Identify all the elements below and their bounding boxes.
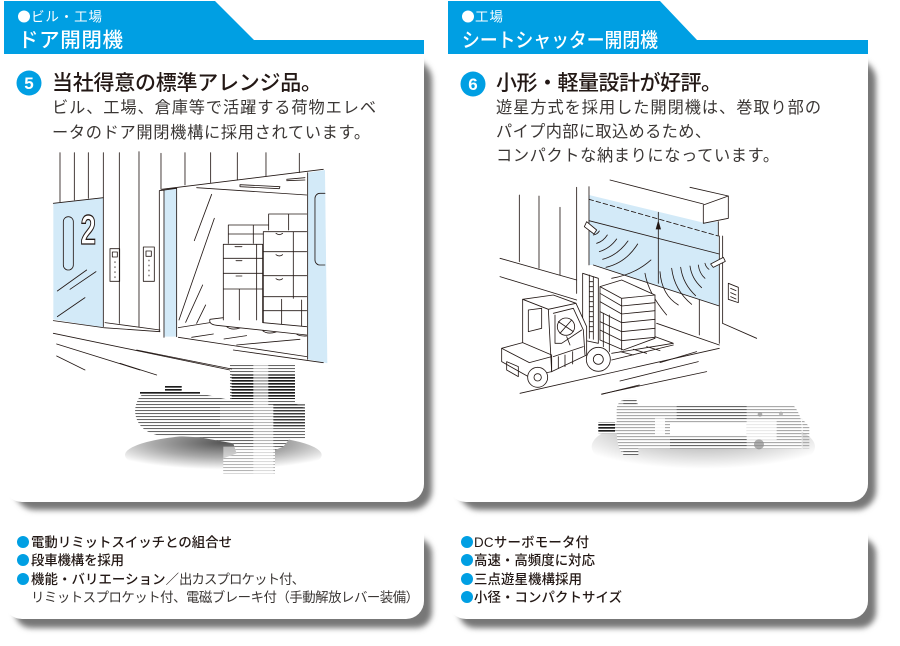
left feature list: リミットスプロケット付、電磁ブレーキ付（手動解放レバー装備）	[31, 589, 419, 605]
left feature list panel	[4, 528, 432, 628]
right body text: コンパクトな納まりになっています。	[496, 147, 779, 165]
right feature list: 三点遊星機構採用	[474, 572, 582, 587]
right header tab	[448, 1, 868, 54]
left feature list: 機能・バリエーション／	[31, 572, 179, 587]
left feature list: 出カスプロケット付、	[179, 572, 305, 587]
illustration: elevator door with cargo	[53, 152, 327, 370]
right feature list	[461, 535, 622, 605]
right header tab: シートシャッター開閉機	[462, 29, 658, 52]
illustration: forklift and sheet shutter	[500, 180, 757, 394]
left main panel: ドア開閉機	[4, 50, 432, 510]
left body text: ータのドア開閉機構に採用されています。	[52, 124, 370, 142]
right heading with number badge: 6	[468, 75, 478, 94]
left header tab: ビル・工場	[31, 10, 102, 24]
right feature list: DCサーボモータ付	[474, 535, 589, 550]
right body text: パイプ内部に取込めるため、	[496, 123, 711, 141]
right header tab: 工場	[475, 10, 503, 24]
left header tab	[4, 1, 424, 54]
left feature list	[17, 535, 419, 605]
right feature list: 小径・コンパクトサイズ	[474, 589, 622, 605]
left body text: ビル、工場、倉庫等で活躍する荷物エレベ	[52, 99, 376, 117]
left feature list: 電動リミットスイッチとの組合せ	[31, 535, 232, 550]
left heading with number badge: 当社得意の標準アレンジ品。	[52, 72, 322, 95]
right feature list: 高速・高頻度に対応	[474, 552, 596, 568]
left heading with number badge: 5	[24, 74, 34, 93]
illustration: elevator door with cargo: 2	[81, 206, 96, 253]
illustration: door motor product photo	[120, 350, 323, 476]
left feature list: 段車機構を採用	[31, 552, 124, 568]
right feature list panel	[448, 528, 876, 628]
right body text	[496, 99, 821, 165]
right heading with number badge: 小形・軽量設計が好評。	[496, 72, 722, 95]
left body text	[52, 99, 376, 142]
right body text: 遊星方式を採用した開閉機は、巻取り部の	[496, 99, 821, 117]
right main panel: シートシャッター開閉機	[448, 50, 876, 510]
illustration: sheet shutter motor product photo	[592, 385, 815, 478]
left header tab: ドア開閉機	[18, 29, 124, 52]
